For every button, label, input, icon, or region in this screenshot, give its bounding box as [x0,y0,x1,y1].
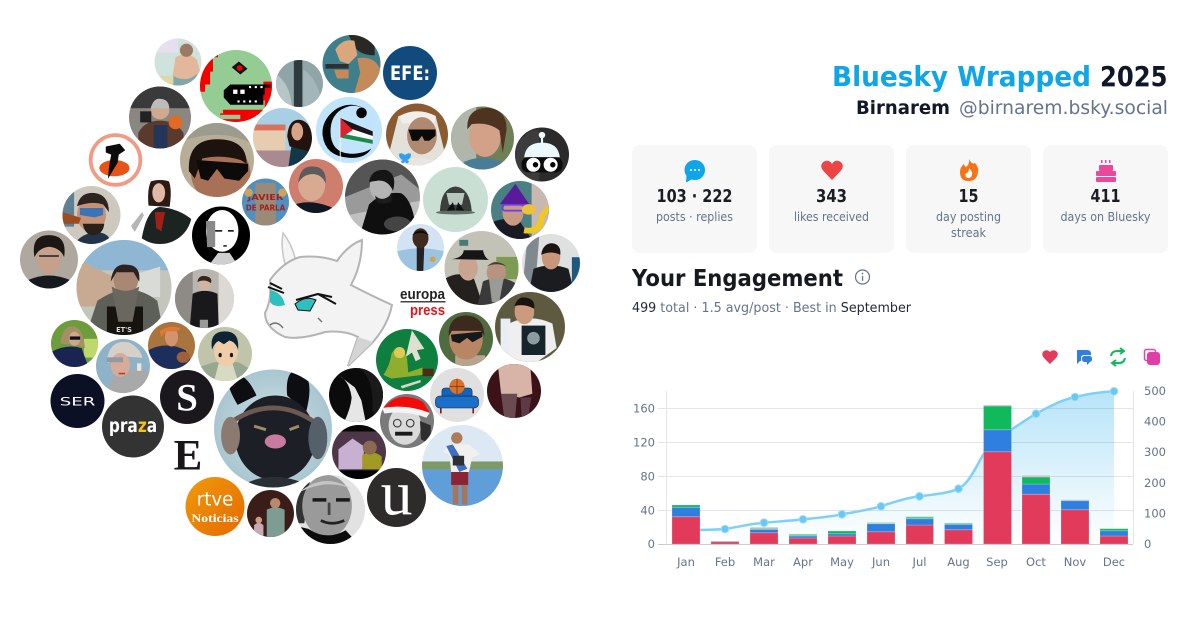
stat card: likes: likes received [794,210,869,224]
avatar: u logo [367,458,426,529]
bar: Nov [1061,500,1089,544]
unicorn left eye [270,290,285,306]
avatar: robot dome [515,128,569,182]
left axis: 0 [648,537,655,551]
avatar: man holding book [495,292,565,362]
avatar: C with Palestinian flag [316,97,382,163]
title: 2025 [1100,60,1168,93]
avatar: praza logo [102,396,164,458]
display name: Birnarem [856,97,950,119]
avatar: long beard man: ET'S [116,326,132,334]
avatar: woman in black and white [329,368,383,422]
right axis: 300 [1144,445,1166,459]
europa press logo: europa [400,287,446,303]
europa press logo [400,287,446,319]
bluesky butterfly badge [399,153,411,163]
month labels: Aug [947,555,970,569]
month labels: Dec [1103,555,1125,569]
avatar: red ninja logo [88,133,142,187]
engagement summary: 499 total · 1.5 avg/post · Best in September [632,301,912,316]
avatar: rtve Noticias logo: Noticias [191,511,239,525]
stat card: posts and replies: 103 · 222 [656,187,732,207]
avatar: two men selfie [444,231,518,305]
avatar: SER logo: SER [60,394,95,408]
right axis: 400 [1144,414,1166,428]
bar: Feb [711,541,739,544]
stat card: days on Bluesky: days on Bluesky [1060,210,1150,224]
stat card: days on Bluesky [1043,145,1168,253]
cumulative area [686,391,1114,544]
avatar: u logo: u [381,458,412,529]
month labels: Nov [1064,555,1086,569]
avatar: curly glasses man [20,230,78,288]
avatar: praza logo: praza [109,416,157,437]
bar: Jun [867,522,895,544]
avatar: anime boy [198,327,252,381]
legend: quotes [1144,350,1160,365]
avatar: silver fan woman [96,339,150,393]
avatar: black and white old man [296,475,365,544]
section heading: Your Engagement [631,266,843,292]
avatar: curly haired man [451,106,514,170]
avatar: woman with glasses and blue coat [51,320,98,367]
month labels: Apr [793,555,813,569]
handle: @birnarem.bsky.social [959,97,1168,119]
avatar: rtve Noticias logo [186,477,244,536]
avatar: purple dog and man [332,425,386,479]
icon: chat bubble [684,160,705,182]
bars [672,405,1128,544]
europa press logo: press [410,303,445,319]
unicorn mascot [265,233,392,366]
unicorn horn [282,233,297,270]
icon: birthday cake [1096,160,1116,182]
avatar: bunny with headphones [214,370,332,488]
avatar: Javier de Parla [242,178,289,226]
legend: likes [1042,350,1058,364]
bar: Oct [1022,475,1050,544]
avatar: Zelda character with cursor [376,329,438,391]
unicorn chest shadow [348,337,373,366]
icon: heart [821,161,843,180]
cumulative line [686,391,1114,530]
month labels: Jun [871,555,890,569]
avatar: EFE logo: EFE: [390,62,430,85]
stat card: streak: day posting [936,210,1001,224]
unicorn lashes [268,283,336,304]
avatar: Groucho with santa hat [380,394,434,448]
chart legend [1042,348,1160,366]
avatar: man drinking beer [62,186,120,244]
bar: Aug [944,523,972,544]
unicorn right eye [295,298,316,311]
left axis: 40 [640,504,655,518]
stat card: likes [769,145,894,253]
avatar: S logo: S [176,376,198,420]
avatar: SER logo [50,374,104,428]
unicorn head and neck [265,240,392,366]
icon: flame [960,159,978,181]
bar: Mar [750,527,778,544]
avatar: long beard man [76,240,172,335]
right axis: 500 [1144,384,1166,398]
right axis: 100 [1144,506,1166,520]
stat card: likes: 343 [816,187,847,207]
left axis [633,391,666,551]
month labels: Jan [676,555,695,569]
month labels: Feb [715,555,735,569]
month labels: Sep [986,555,1008,569]
avatar: man in dark shirt [522,234,580,292]
avatar: suited man [175,269,234,328]
month labels: Jul [912,555,926,569]
avatar: painting of woman [322,35,380,93]
engagement chart [633,384,1166,569]
avatar: bald hero [192,206,250,264]
bar: Jul [906,517,934,544]
avatar: rtve Noticias logo: rtve [197,488,233,510]
avatar: woman with sword [131,180,192,244]
avatar: man in sunglasses, large [180,123,254,203]
stat card: posts and replies [632,145,757,253]
avatar: turtle illustration [423,167,488,232]
stat card: streak: 15 [958,187,978,207]
avatar: Javier de Parla: DE PARLA [246,203,286,212]
avatar: runner by the water [422,425,503,506]
avatar: man with film reel [129,86,191,148]
avatar: purple wizard hat [491,181,549,239]
right axis: 200 [1144,476,1166,490]
avatar cluster [20,35,580,544]
avatar: E logo: E [174,432,202,480]
left axis: 160 [633,402,655,416]
avatar: EFE logo [383,46,437,100]
bar: Sep [984,405,1012,544]
bar: Apr [789,534,817,544]
month labels [676,555,1125,569]
avatar: S logo [160,370,214,424]
stat card: streak: streak [951,226,986,240]
bar: May [828,531,856,544]
avatar: man in blue jacket [148,322,195,369]
avatar: basketball on blue sofa [430,368,484,422]
avatar: woman with dark hair [253,108,312,167]
avatar: grey statue [276,60,323,107]
month labels: May [830,555,854,569]
stat card: posts and replies: posts · replies [656,210,733,224]
right axis: 0 [1144,537,1151,551]
avatar: beach woman [154,38,202,86]
avatar: green pixel dinosaur [200,50,272,122]
month labels: Oct [1026,555,1046,569]
legend: reposts [1111,348,1125,366]
left axis: 120 [633,436,655,450]
left axis: 80 [640,470,655,484]
right axis [1134,384,1166,551]
title: Bluesky Wrapped [832,60,1091,93]
unicorn frown [270,318,322,328]
bar: Jan [672,505,700,544]
icon: info [856,270,870,284]
avatar: Javier de Parla: JAVIER [246,193,283,202]
month labels: Mar [753,555,775,569]
avatar: man with sunglasses outdoors [439,312,493,366]
cumulative points [721,388,1118,533]
legend: replies [1076,350,1092,365]
stat card: streak [906,145,1031,253]
avatar: man on red wall [289,159,343,213]
avatar: man on stage [247,490,294,537]
bar: Dec [1100,529,1128,544]
stat card: days on Bluesky: 411 [1090,187,1120,207]
avatar: black and white man [345,160,420,234]
avatar: pink skirt photo [487,364,541,418]
avatar: police officer [397,224,444,271]
avatar: sunglasses portrait [386,104,448,166]
